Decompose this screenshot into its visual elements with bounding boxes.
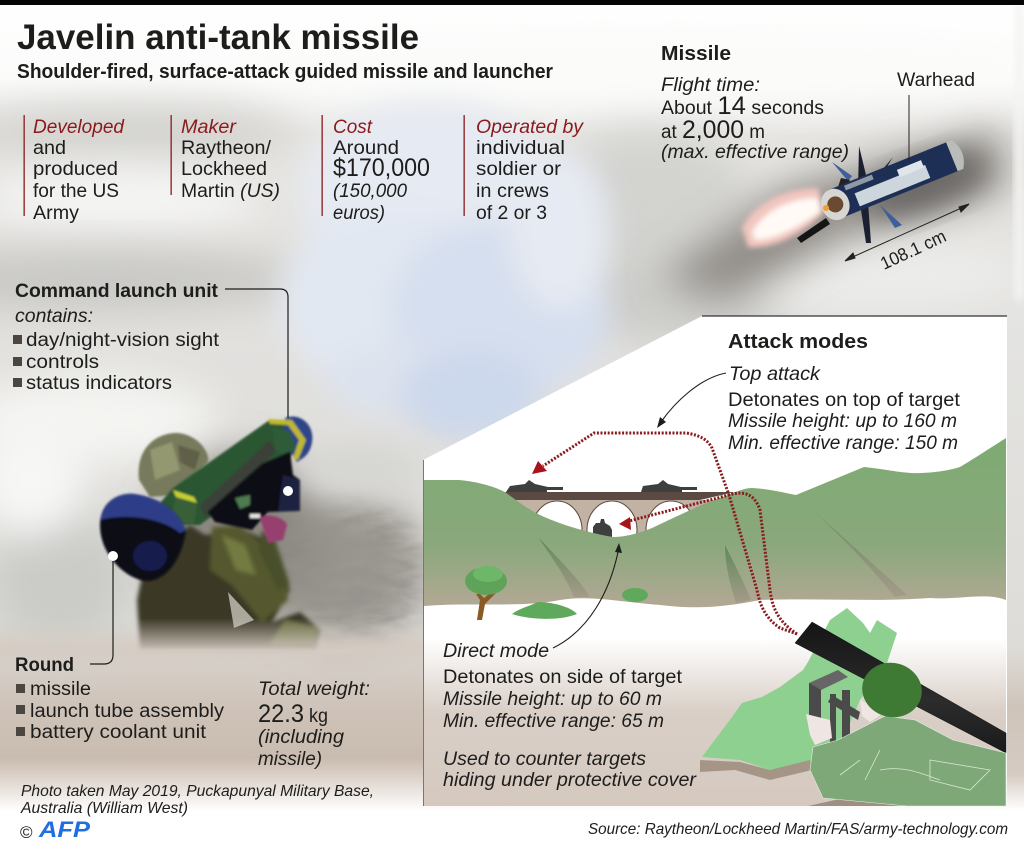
direct mode text: Missile height: up to 60 m	[443, 689, 662, 710]
panel background	[423, 316, 1007, 806]
round text	[15, 655, 225, 743]
direct mode text	[443, 641, 697, 791]
fact column: maker: Lockheed	[181, 159, 267, 180]
blue smoke cloud	[280, 100, 610, 440]
top attack text	[728, 364, 961, 454]
missile illustration	[742, 95, 969, 274]
soil under shooter	[808, 790, 910, 806]
total weight: missile)	[258, 749, 322, 770]
photo credit: Photo taken May 2019, Puckapunyal Military Base,	[21, 783, 374, 800]
fact column: cost	[322, 115, 430, 224]
top black bar	[0, 0, 1024, 5]
tree	[465, 566, 507, 620]
fact column: operated by: in crews	[476, 181, 549, 202]
missile smoke trail	[660, 130, 1005, 300]
fact column: cost: euros)	[333, 203, 385, 224]
subtitle: Shoulder-fired, surface-attack guided missile and launcher	[17, 61, 553, 83]
round text: missile	[30, 679, 91, 700]
missile text block: Flight time:	[661, 75, 760, 96]
photo: soldier firing launcher	[100, 417, 320, 650]
fact column: maker: Raytheon/	[181, 138, 272, 159]
fact column: operated by: Operated by	[476, 117, 585, 138]
rocket flame	[742, 188, 824, 247]
total weight: Total weight:	[258, 679, 370, 700]
panel: attack modes	[423, 316, 1007, 806]
fact column: cost: Cost	[333, 117, 373, 138]
fact column: developed: Developed	[33, 117, 125, 138]
launcher sight	[809, 670, 860, 756]
battlefield ground haze	[267, 498, 423, 642]
top attack text: Min. effective range: 150 m	[728, 433, 958, 454]
soft fade below soldier	[0, 618, 423, 678]
AFP logo: AFP	[38, 817, 90, 842]
warhead leader	[908, 95, 910, 160]
missile text block	[661, 43, 849, 163]
helmet	[856, 656, 928, 724]
helmet	[139, 433, 208, 497]
fact column: cost: Around	[333, 138, 399, 159]
shooter arm creases	[840, 750, 990, 790]
total weight	[258, 679, 370, 770]
total weight: 22.3 kg	[258, 700, 328, 728]
leader lines for launch unit and round	[90, 289, 288, 664]
command launch unit text: Command launch unit	[15, 281, 219, 302]
fact column: operated by	[464, 115, 585, 224]
direct mode text: Detonates on side of target	[443, 667, 683, 688]
fact column: maker	[170, 115, 280, 202]
command launch unit text: status indicators	[26, 373, 172, 394]
round text: launch tube assembly	[30, 701, 225, 722]
launcher tube	[160, 417, 312, 525]
missile text block: (max. effective range)	[661, 142, 849, 163]
fact column: developed: for the US	[33, 181, 119, 202]
shooter body	[810, 716, 1006, 806]
bridge	[505, 492, 735, 559]
length label: 108.1 cm	[877, 226, 949, 274]
round: battery coolant end	[100, 494, 186, 581]
snow foreground edge	[424, 596, 1006, 640]
terrain strip	[700, 760, 812, 780]
direct mode text: Direct mode	[443, 641, 549, 662]
sighting dots	[108, 486, 293, 561]
fact column: operated by: of 2 or 3	[476, 203, 547, 224]
fact column: developed: produced	[33, 159, 118, 180]
source: Source: Raytheon/Lockheed Martin/FAS/army-technology.com	[588, 821, 1008, 838]
AFP logo	[20, 817, 90, 842]
AFP logo: ©	[20, 823, 33, 842]
top attack text: Detonates on top of target	[728, 390, 961, 411]
warhead label: Warhead	[897, 70, 975, 91]
top attack text: Missile height: up to 160 m	[728, 411, 957, 432]
missile text block: Missile	[661, 43, 731, 65]
command launch unit text: contains:	[15, 306, 93, 327]
hills	[424, 438, 1006, 610]
fact column: operated by: individual	[476, 138, 565, 159]
photo credit	[20, 783, 374, 817]
arrow: direct mode	[553, 543, 622, 648]
tanks	[506, 480, 697, 538]
fact column: operated by: soldier or	[476, 159, 562, 180]
fact column: cost: $170,000	[333, 154, 430, 182]
direct mode flight path	[619, 493, 797, 634]
arrow: top attack	[657, 373, 726, 428]
round text: battery coolant unit	[30, 722, 207, 743]
title: Javelin anti-tank missile	[17, 18, 419, 57]
top attack text: Top attack	[729, 364, 822, 385]
command launch unit text: controls	[26, 352, 99, 373]
fact column: maker: Martin (US)	[181, 181, 280, 202]
command launch unit text: day/night-vision sight	[26, 330, 220, 351]
round text: Round	[15, 655, 74, 676]
top attack flight path	[532, 433, 797, 634]
fact column: maker: Maker	[181, 117, 237, 138]
missile text block: at 2,000 m	[661, 116, 765, 144]
foreground ground	[424, 596, 1006, 806]
fins	[858, 146, 871, 243]
fact column: developed: and	[33, 138, 66, 159]
launcher tube	[795, 622, 1006, 753]
heading: Attack modes	[728, 331, 868, 353]
photo credit: Australia (William West)	[20, 800, 188, 817]
direct mode text: hiding under protective cover	[443, 770, 697, 791]
command launch unit text	[13, 281, 220, 394]
shooter's bush	[702, 608, 897, 770]
missile body	[816, 138, 968, 224]
fact column: developed: Army	[33, 203, 80, 224]
command launch unit	[208, 452, 300, 543]
hill crevices	[538, 497, 907, 603]
length dimension arrow	[845, 204, 969, 261]
total weight: (including	[258, 727, 344, 748]
missile text block: About 14 seconds	[661, 92, 824, 120]
fact column: cost: (150,000	[333, 181, 407, 202]
direct mode text: Min. effective range: 65 m	[443, 711, 664, 732]
shooter hand	[806, 714, 832, 745]
bushes	[512, 588, 648, 619]
fact column: developed	[24, 115, 125, 224]
soldier body	[137, 525, 320, 650]
direct mode text: Used to counter targets	[443, 749, 647, 770]
